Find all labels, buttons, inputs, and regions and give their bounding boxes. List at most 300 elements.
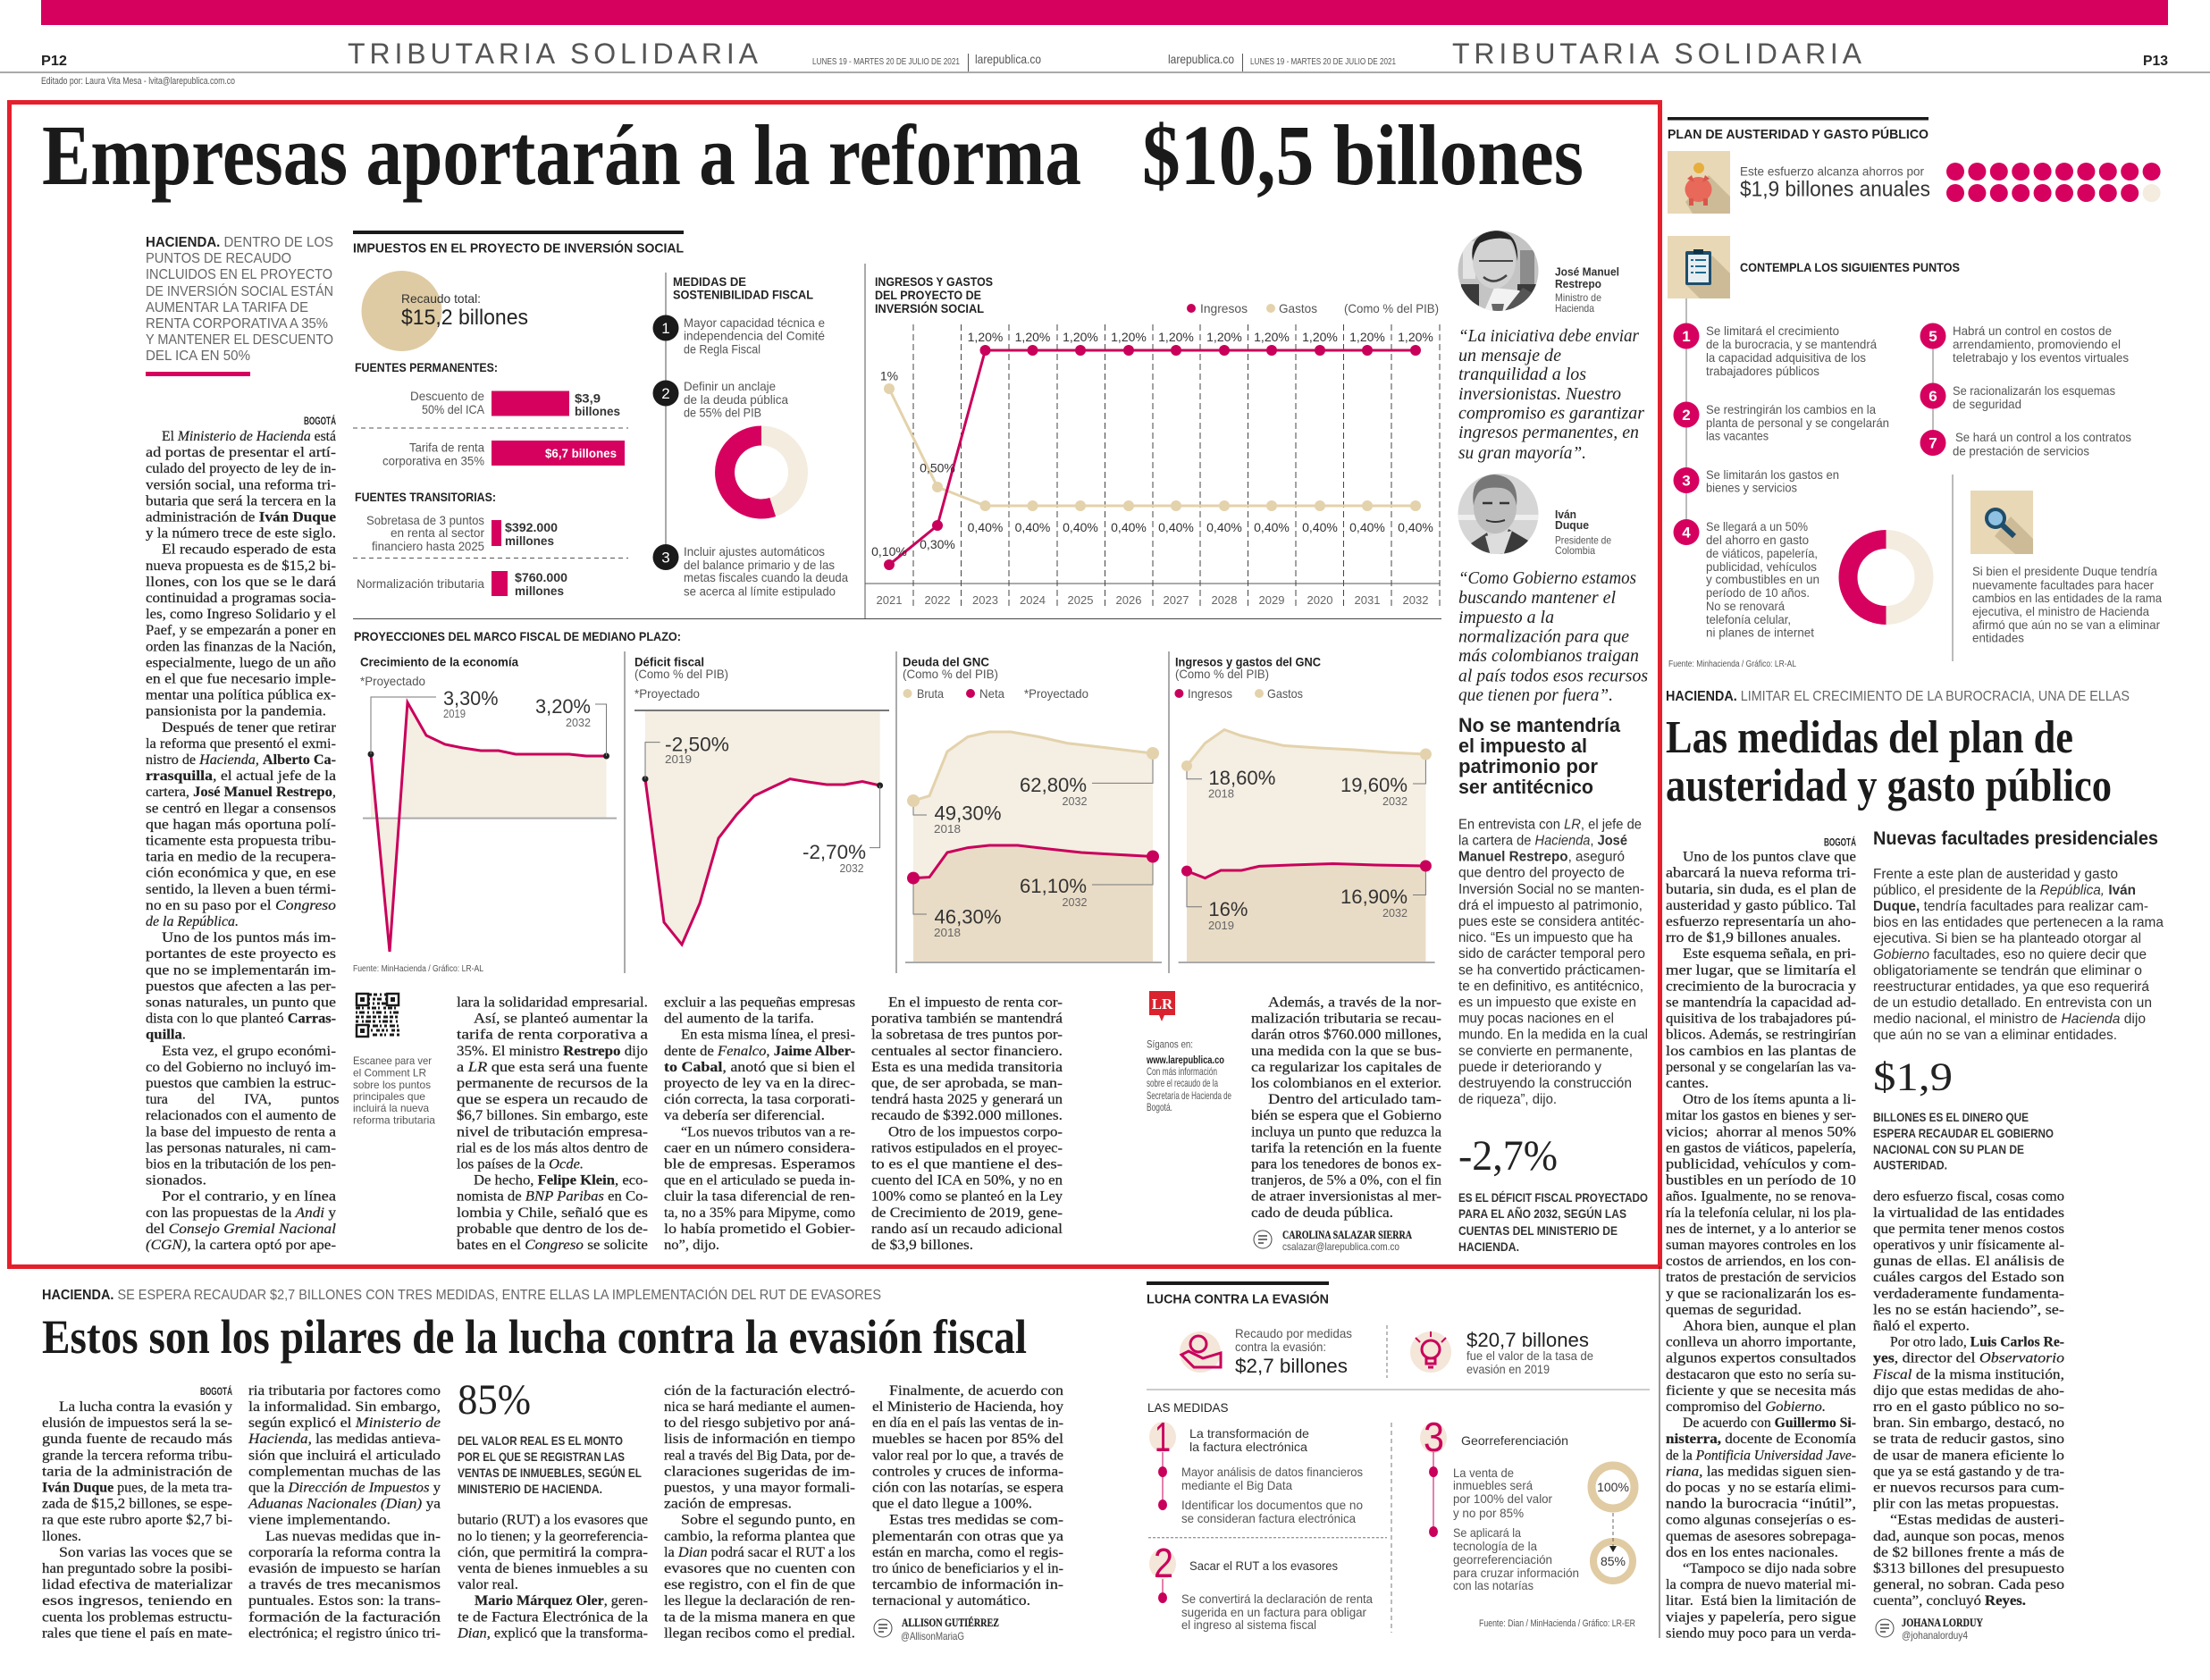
value labels: 1,20% bbox=[1302, 330, 1338, 344]
point 1: Se limitará el crecimiento bbox=[1706, 323, 1839, 338]
austerity article column B: la virtualidad de las entidades bbox=[1873, 1205, 2064, 1221]
article column 3: ble de empresas. Esperamos bbox=[664, 1156, 855, 1172]
point 2: las vacantes bbox=[1706, 429, 1769, 443]
evasion article column 4: zación de empresas. bbox=[664, 1497, 792, 1512]
article column 3: del aumento de la tarifa. bbox=[664, 1012, 814, 1027]
value labels: 1,20% bbox=[1398, 330, 1433, 344]
value labels: 0,40% bbox=[1063, 520, 1098, 534]
article column 5: tranjeros, de 5% a 0%, con el fin bbox=[1251, 1173, 1441, 1189]
article column 1: nistro de Hacienda, Alberto Ca- bbox=[146, 752, 336, 768]
article column 2: bates en el Congreso se solicite bbox=[457, 1238, 648, 1253]
austerity article column A: ficiente y que se necesita más bbox=[1666, 1383, 1856, 1399]
subheading: el impuesto al bbox=[1458, 735, 1587, 757]
chart: ingresos y gastos del GNC: Ingresos y gastos del GNC bbox=[1175, 654, 1321, 668]
evasion article column 5: que el dato llegue a 100%. bbox=[872, 1497, 1032, 1512]
byline: Allison Gutierrez: @AllisonMariaG bbox=[901, 1630, 964, 1642]
article column 1: sonas naturales, un punto que bbox=[146, 995, 336, 1010]
quote: Restrepo: su gran mayoría”. bbox=[1458, 443, 1586, 463]
article column 3: dente de Fenalco, Jaime Alber- bbox=[664, 1044, 855, 1059]
medida 1: Mayor análisis de datos financieros bbox=[1181, 1465, 1363, 1479]
panel: proyecciones del marco fiscal bbox=[353, 629, 1435, 974]
chart: deficit fiscal bbox=[634, 654, 889, 945]
note text: afirmó que aún no se van a eliminar bbox=[1972, 617, 2160, 632]
heading bar bbox=[1147, 1281, 1329, 1285]
site left: larepublica.co bbox=[975, 52, 1041, 66]
article column 1: la reforma que presentó el exmi- bbox=[146, 736, 336, 752]
article column 4: Esta es una medida transitoria bbox=[871, 1060, 1063, 1075]
QR caption bbox=[353, 1054, 435, 1126]
austerity article column B: que ya se está gastando y de tra- bbox=[1873, 1464, 2064, 1479]
article column 4: la sobretasa de tres puntos por- bbox=[871, 1028, 1063, 1043]
article column 2: rial es de los más altos dentro de bbox=[457, 1140, 648, 1155]
icon: clipboard bbox=[1668, 236, 1730, 298]
austerity article column A: cantes. bbox=[1666, 1076, 1709, 1091]
portrait: Duque bbox=[1457, 472, 1541, 556]
point 5: Habrá un control en costos de bbox=[1953, 323, 2112, 338]
item 3: del balance primario y de las bbox=[684, 558, 835, 572]
point 4 bbox=[1673, 519, 1819, 640]
austerity article column A: como algunas consejerías o es- bbox=[1666, 1513, 1856, 1528]
follow text bbox=[1146, 1038, 1231, 1113]
evasion article column 5: muebles se hacen por 85% del bbox=[872, 1432, 1064, 1447]
austerity article column A: destacaron que esto no sería su- bbox=[1666, 1367, 1856, 1382]
chart: deuda del GNC: (Como % del PIB) bbox=[903, 667, 998, 681]
panel: lucha contra la evasion: contra la evasión: bbox=[1235, 1340, 1326, 1354]
austerity article column A bbox=[1666, 835, 1857, 1641]
chart: deuda del GNC: 2032 bbox=[1062, 895, 1087, 909]
article column 1 bbox=[146, 414, 339, 1253]
chart: ingresos y gastos del GNC: 16,90% bbox=[1340, 886, 1408, 908]
evasion article column 4: nica se hará mediante el aumen- bbox=[664, 1399, 855, 1415]
article column 1: ción económica y que, en ese bbox=[146, 866, 336, 881]
chart title bbox=[875, 274, 993, 315]
medida 1: Identificar los documentos que no bbox=[1181, 1498, 1363, 1512]
austerity article column B bbox=[1872, 1189, 2064, 1609]
evasion article column 1: llones. bbox=[42, 1529, 81, 1544]
legend bbox=[1187, 301, 1439, 315]
article column 1: administración de Iván Duque bbox=[146, 509, 336, 525]
austerity article column B: que permita tener menos costos bbox=[1873, 1222, 2064, 1237]
name: Duque: Iván bbox=[1555, 508, 1576, 521]
evasion article column 1: esos ingresos, teniendo en bbox=[42, 1593, 232, 1609]
article column 2: De hecho, Felipe Klein, eco- bbox=[474, 1173, 648, 1189]
quote: Restrepo: ingresos permanentes, en bbox=[1458, 423, 1639, 442]
fuentes transitorias: $392.000 bbox=[505, 520, 558, 534]
austerity article column A: publicidad, vehículos y com- bbox=[1666, 1156, 1856, 1172]
point 2: 2 bbox=[1682, 407, 1691, 424]
heading bar bbox=[1668, 117, 1928, 120]
nuevas facultades text: obligatoriamente se tendrán que eliminar o bbox=[1873, 963, 2142, 979]
austerity article column B: yes, director del Observatorio bbox=[1873, 1351, 2064, 1366]
article column 2: nivel de tributación empresa- bbox=[457, 1124, 648, 1139]
chart title: DEL PROYECTO DE bbox=[875, 288, 981, 302]
chart: deficit fiscal: 2032 bbox=[840, 861, 863, 875]
article column 1: Por el contrario, y en línea bbox=[162, 1189, 336, 1205]
evasion article column 2: evasión de impuesto se harían bbox=[248, 1561, 441, 1576]
chart: deuda del GNC: 46,30% bbox=[935, 906, 1001, 928]
year labels: 2022 bbox=[925, 593, 950, 607]
austerity article column B: operativos y unir físicamente al- bbox=[1873, 1238, 2064, 1253]
sidebar article: drá el impuesto al patrimonio, bbox=[1458, 898, 1643, 913]
austerity article column A: tratos de prestación de servicios bbox=[1666, 1270, 1856, 1285]
chart: crecimiento de la economia: Fuente: MinHacienda / Gráfico: LR-AL bbox=[353, 964, 483, 974]
article column 1: taria en medio de la recupera- bbox=[146, 850, 336, 865]
chart: crecimiento de la economia bbox=[353, 654, 617, 974]
item 3 bbox=[652, 544, 848, 599]
deck: Hacienda austeridad: HACIENDA. LIMITAR EL CRECIMIENTO DE LA BUROCRACIA, UNA DE ELLAS bbox=[1666, 689, 2130, 704]
value labels: 1,20% bbox=[1349, 330, 1385, 344]
point 4: del ahorro en gasto bbox=[1706, 533, 1809, 547]
evasion article column 2: ria tributaria por factores como bbox=[248, 1383, 441, 1399]
article column 5: cado de deuda pública. bbox=[1251, 1205, 1393, 1221]
chart: crecimiento de la economia: 3,20% bbox=[535, 695, 591, 718]
medida 3: inmuebles será bbox=[1453, 1478, 1533, 1492]
evasion article column 5: Estas tres medidas se com- bbox=[889, 1513, 1063, 1528]
article column 3: proyecto de ley va en la direc- bbox=[664, 1076, 855, 1091]
recaudo total bbox=[361, 271, 528, 351]
article column 1: (CGN), la cartera optó por ape- bbox=[146, 1238, 336, 1253]
year labels: 2027 bbox=[1164, 593, 1189, 607]
article column 1: y la número trece de este siglo. bbox=[146, 526, 336, 542]
value labels: 1% bbox=[880, 368, 898, 382]
evasion article column 4 bbox=[664, 1383, 855, 1641]
article column 4: de $3,9 billones. bbox=[871, 1238, 973, 1253]
recaudo total: Recaudo total: bbox=[401, 291, 481, 306]
fuentes transitorias: Normalización tributaria bbox=[357, 576, 484, 591]
deck: Hacienda: DE INVERSIÓN SOCIAL ESTÁN bbox=[146, 282, 333, 299]
follow text: Bogotá. bbox=[1147, 1101, 1172, 1113]
year labels: 2028 bbox=[1212, 593, 1237, 607]
point 6: de seguridad bbox=[1953, 397, 2021, 411]
point 1: la capacidad adquisitiva de los bbox=[1706, 350, 1866, 365]
chart: ingresos y gastos del GNC: 2019 bbox=[1208, 919, 1234, 932]
evasion article column 3: butario (RUT) a los evasores que bbox=[458, 1513, 648, 1528]
article column 1: Después de tener que retirar bbox=[162, 720, 337, 735]
site right: larepublica.co bbox=[1168, 52, 1234, 66]
QR caption: incluirá la nueva bbox=[353, 1102, 429, 1114]
fuentes transitorias: en renta al sector bbox=[391, 525, 484, 540]
austerity article column B: de $2 billones frente a más de bbox=[1873, 1545, 2064, 1560]
editor credit: Editado por: Laura Vita Mesa - lvita@larepublica.com.co bbox=[41, 76, 235, 87]
LR follow box bbox=[1146, 991, 1231, 1113]
austerity article column A: y que se racionalizarán los es- bbox=[1666, 1286, 1856, 1301]
fuentes transitorias: FUENTES TRANSITORIAS: bbox=[355, 490, 496, 504]
article column 5 bbox=[1251, 995, 1441, 1221]
article column 4: centuales al sector financiero. bbox=[871, 1044, 1063, 1059]
article column 5: ca regularizar los capitales de bbox=[1251, 1060, 1441, 1075]
quote: Duque: más colombianos traigan bbox=[1458, 646, 1639, 666]
panel: impuestos en el proyecto bbox=[353, 231, 684, 598]
medida 1: se consideran factura electrónica bbox=[1181, 1511, 1356, 1525]
year labels: 2024 bbox=[1020, 593, 1046, 607]
evasion article column 4: ese registro, con el fin de que bbox=[664, 1577, 855, 1592]
chart: ingresos y gastos del GNC: 2032 bbox=[1382, 794, 1408, 808]
article column 1: rrasquilla , el actual jefe de la bbox=[146, 769, 336, 784]
QR caption: el Comment LR bbox=[353, 1067, 426, 1079]
point 5 bbox=[1920, 323, 2129, 365]
fuentes permanentes: Descuento de bbox=[410, 389, 484, 403]
medida 2: Sacar el RUT a los evasores bbox=[1189, 1558, 1338, 1573]
article column 3: que en el articulado se pueda in- bbox=[664, 1173, 855, 1189]
evasion article column 1: grande la tercera reforma tribu- bbox=[42, 1448, 232, 1463]
chart: deficit fiscal: Déficit fiscal bbox=[634, 654, 704, 668]
article column 1: Paef, y se empezarán a poner en bbox=[146, 623, 336, 638]
item 1: 1 bbox=[661, 320, 670, 337]
panel: lucha contra la evasion: fue el valor de la tasa de bbox=[1466, 1348, 1593, 1363]
point 6 bbox=[1920, 382, 2115, 411]
sidebar article: Inversión Social no se manten- bbox=[1458, 882, 1644, 897]
medida 3: georreferenciación bbox=[1453, 1552, 1552, 1567]
austerity article column A: vicios; ahorrar al menos 50% bbox=[1666, 1124, 1856, 1139]
sidebar article: muy pocas naciones en el bbox=[1458, 1012, 1614, 1027]
article column 1: tura del IVA, puntos bbox=[146, 1092, 339, 1107]
article column 2: probable que dentro de los de- bbox=[457, 1222, 648, 1237]
subheading: ser antitécnico bbox=[1458, 776, 1593, 798]
panel: medidas de sostenibilidad fiscal bbox=[652, 273, 848, 599]
subheading bbox=[1458, 714, 1621, 798]
year gridlines bbox=[913, 324, 1440, 609]
evasion article column 2: que la Dirección de Impuestos y bbox=[248, 1480, 441, 1496]
article column 1: no en su paso por el Congreso bbox=[146, 898, 336, 913]
article column 1: les, como Ingreso Solidario y el bbox=[146, 607, 337, 622]
note text: Si bien el presidente Duque tendría bbox=[1972, 564, 2157, 578]
article column 1: la base del impuesto de renta a bbox=[146, 1124, 336, 1139]
chart: ingresos y gastos del GNC bbox=[1174, 654, 1435, 962]
source: Fuente: Dian / MinHacienda / Gráfico: LR-ER bbox=[1479, 1618, 1635, 1629]
item 2 bbox=[652, 379, 788, 420]
article column 1: Uno de los puntos más im- bbox=[162, 930, 336, 945]
evasion article column 1: Son varias las voces que se bbox=[59, 1545, 232, 1560]
evasion article column 5: en día en el país las ventas de in- bbox=[872, 1415, 1063, 1431]
chart: deuda del GNC: *Proyectado bbox=[1024, 686, 1088, 701]
austerity article column B: plir con las metas propuestas. bbox=[1873, 1497, 2059, 1512]
source: Fuente: Minhacienda / Gráfico: LR-AL bbox=[1668, 659, 1796, 669]
point 1 bbox=[1673, 323, 1877, 378]
article column 2: a LR que esta será una fuente bbox=[457, 1060, 648, 1075]
evasion article column 4: la Dian podrá sacar el RUT a los bbox=[664, 1545, 855, 1560]
austerity article column A: algunos expertos consultados bbox=[1666, 1351, 1856, 1366]
evasion article column 1: La lucha contra la evasión y bbox=[59, 1399, 232, 1415]
medida 3: 3 bbox=[1424, 1414, 1444, 1460]
article column 5: darán otros $760.000 millones, bbox=[1251, 1028, 1441, 1043]
chart: ingresos y gastos del GNC: Gastos bbox=[1267, 686, 1303, 701]
austerity article column A: abarcará la nueva reforma tri- bbox=[1666, 866, 1856, 881]
article column 3: ción correcta, la tasa corporati- bbox=[664, 1092, 855, 1107]
medida 3: La venta de bbox=[1453, 1466, 1514, 1480]
name: Restrepo: Restrepo bbox=[1555, 277, 1601, 290]
austerity article column A: ría la telefonía celular, ni los pla- bbox=[1666, 1205, 1856, 1221]
sidebar article: destruyendo la construcción bbox=[1458, 1076, 1632, 1091]
year labels: 2025 bbox=[1068, 593, 1093, 607]
evasion article column 5: plementarán con otras que ya bbox=[872, 1529, 1063, 1544]
austerity article column A: siendo muy poco para un verda- bbox=[1666, 1625, 1856, 1641]
point 1: 1 bbox=[1682, 328, 1691, 345]
chart: ingresos y gastos del GNC: Ingresos bbox=[1188, 686, 1232, 701]
fuentes transitorias: financiero hasta 2025 bbox=[372, 539, 484, 553]
article column 1: que no se implementarán im- bbox=[146, 962, 336, 978]
evasion article column 2: corporaría la reforma contra la bbox=[248, 1545, 441, 1560]
evasion article column 2: sión que incluirá el articulado bbox=[248, 1448, 441, 1463]
subheading: LAS MEDIDAS bbox=[1147, 1400, 1228, 1415]
austerity article column B: dijo que estas medidas de aho- bbox=[1873, 1383, 2064, 1399]
ring gauges 100% to 85%: 100% bbox=[1597, 1480, 1629, 1494]
byline: Johana Lorduy: @johanalorduy4 bbox=[1902, 1629, 1968, 1642]
article column 2: los países de la Ocde. bbox=[457, 1156, 584, 1172]
austerity article column A: viajes y papelería, pero sigue bbox=[1666, 1609, 1856, 1625]
medida 3 bbox=[1420, 1414, 1579, 1592]
heading: PLAN DE AUSTERIDAD Y GASTO PÚBLICO bbox=[1668, 126, 1928, 142]
evasion article column 5: ción con las notarías, se espera bbox=[872, 1480, 1063, 1496]
article column 4: recaudo de $392.000 millones. bbox=[871, 1108, 1063, 1123]
article column 1: las personas naturales, ni cam- bbox=[146, 1140, 336, 1155]
austerity article column A: bustibles en un período de 10 bbox=[1666, 1173, 1856, 1189]
red highlight frame bbox=[9, 102, 1660, 1267]
quote: Duque: “Como Gobierno estamos bbox=[1458, 568, 1636, 588]
chart: ingresos y gastos del GNC: 18,60% bbox=[1208, 767, 1275, 789]
deck: Hacienda: DEL ICA EN 50% bbox=[146, 349, 250, 364]
evasion article column 3: no lo tienen; y la georreferencia- bbox=[458, 1529, 648, 1544]
chart: deficit fiscal: 2019 bbox=[665, 752, 692, 766]
austerity article column B: gunas de ellas. El análisis de bbox=[1873, 1254, 2064, 1269]
article column 2: lombia y Chile, señaló que es bbox=[457, 1205, 648, 1221]
austerity article column A: De acuerdo con Guillermo Si- bbox=[1683, 1415, 1856, 1431]
article column 5: tarifa la retención en la fuente bbox=[1251, 1140, 1441, 1155]
article column 1: cartera, José Manuel Restrepo , bbox=[146, 785, 336, 800]
name: Restrepo: Hacienda bbox=[1555, 302, 1594, 315]
ingresos series bbox=[884, 345, 1421, 570]
note text: nuevamente facultades para hacer bbox=[1972, 577, 2154, 592]
header rule bbox=[0, 71, 2210, 73]
fuentes permanentes: billones bbox=[575, 404, 620, 418]
evasion article column 3: venta de bienes inmuebles a su bbox=[458, 1561, 648, 1576]
value labels: 0,10% bbox=[871, 544, 907, 559]
nuevas facultades text: que aún no se van a eliminar entidades. bbox=[1873, 1028, 2117, 1043]
legend: Ingresos bbox=[1200, 301, 1248, 315]
heading: PROYECCIONES DEL MARCO FISCAL DE MEDIANO PLAZO: bbox=[354, 629, 681, 643]
item 3: Incluir ajustes automáticos bbox=[684, 544, 825, 559]
fuentes permanentes: corporativa en 35% bbox=[382, 454, 484, 468]
big number caption bbox=[458, 1433, 642, 1496]
medida 2: 2 bbox=[1154, 1540, 1173, 1586]
article column 1: del Consejo Gremial Nacional bbox=[146, 1222, 337, 1237]
article column 3: to Cabal , anotó que si bien el bbox=[664, 1060, 856, 1075]
chart: deficit fiscal: *Proyectado bbox=[634, 686, 700, 701]
austerity article column B: Fiscal de la misma institución, bbox=[1872, 1367, 2064, 1382]
article column 3: lo había prometido el Gobier- bbox=[664, 1222, 855, 1237]
fuentes permanentes: Tarifa de renta bbox=[409, 440, 484, 454]
austerity article column A: butaria, sin duda, es el plan de bbox=[1666, 882, 1856, 897]
point 7: de prestación de servicios bbox=[1953, 443, 2089, 458]
deck: Hacienda: INCLUIDOS EN EL PROYECTO bbox=[146, 267, 332, 282]
evasion article column 2: complementan muchas de las bbox=[248, 1464, 441, 1479]
chart: deuda del GNC: 2032 bbox=[1062, 794, 1087, 808]
QR caption: Escanee para ver bbox=[353, 1054, 432, 1067]
chart: ingresos y gastos del GNC: 19,60% bbox=[1340, 774, 1408, 796]
panel: lucha contra la evasion: evasión en 2019 bbox=[1466, 1362, 1550, 1376]
evasion article column 1: lidad efectiva de materializar bbox=[42, 1577, 233, 1592]
quote: Restrepo: inversionistas. Nuestro bbox=[1458, 384, 1621, 404]
byline: Carolina Salazar: CAROLINA SALAZAR SIERRA bbox=[1282, 1228, 1412, 1241]
fuentes transitorias: Sobretasa de 3 puntos bbox=[366, 513, 484, 527]
austerity article column B: $313 billones del presupuesto bbox=[1873, 1561, 2064, 1576]
point 4: y combustibles en un bbox=[1706, 572, 1819, 586]
austerity article column A: compromiso del Gobierno. bbox=[1666, 1399, 1826, 1415]
item 3: se acerca al límite estipulado bbox=[684, 584, 836, 599]
article column 3: “Los nuevos tributos van a re- bbox=[681, 1124, 855, 1139]
icon: hand with coin bbox=[1180, 1331, 1221, 1373]
donut chart 55% bbox=[725, 436, 798, 509]
follow text: www.larepublica.co bbox=[1146, 1054, 1224, 1066]
nuevas facultades text: Gobierno facultades, eso no quiere decir que bbox=[1873, 947, 2147, 962]
heading: MEDIDAS DE bbox=[673, 274, 746, 289]
value labels: 0,40% bbox=[1111, 520, 1147, 534]
austerity article column A: quemas de seguridad. bbox=[1666, 1302, 1802, 1317]
main headline: Empresas aportarán a la reforma bbox=[42, 107, 1081, 203]
year labels: 2023 bbox=[972, 593, 998, 607]
nuevas facultades text: Duque, tendría facultades para realizar cam- bbox=[1873, 899, 2148, 914]
byline: Johana Lorduy bbox=[1876, 1616, 1983, 1642]
medida 3: Georreferenciación bbox=[1461, 1433, 1568, 1448]
portrait: Restrepo bbox=[1457, 229, 1541, 313]
austerity article column A: riana, las medidas siguen sien- bbox=[1666, 1464, 1856, 1479]
chart: deuda del GNC: 2018 bbox=[934, 926, 961, 939]
article column 1: continuidad a programas socia- bbox=[146, 591, 336, 606]
point 5: teletrabajo y los eventos virtuales bbox=[1953, 350, 2129, 365]
article column 1: nueva propuesta es de $15,2 bi- bbox=[146, 559, 336, 574]
article column 1: llones, con los que se le dará bbox=[146, 575, 336, 590]
point 2: planta de personal y se congelarán bbox=[1706, 416, 1889, 430]
austerity article column A: personal y se congelarían las va- bbox=[1666, 1060, 1856, 1075]
medida 2: el ingreso al sistema fiscal bbox=[1181, 1617, 1316, 1632]
QR code block bbox=[353, 994, 435, 1126]
byline: Johana Lorduy: JOHANA LORDUY bbox=[1902, 1616, 1983, 1629]
sidebar article: te en definitivo, es antitécnico, bbox=[1458, 979, 1643, 994]
big number caption bbox=[1873, 1110, 2054, 1172]
austerity article column A: Otro de los ítems apunta a li- bbox=[1683, 1092, 1856, 1107]
chart: deuda del GNC: Bruta bbox=[917, 686, 944, 701]
evasion article column 4: lisis de información en tiempo bbox=[664, 1432, 855, 1447]
nuevas facultades text: público, el presidente de la República, Iván bbox=[1873, 883, 2136, 898]
article column 1: ad portas de presentar el artí- bbox=[146, 445, 336, 460]
evasion article column 2: según explicó el Ministerio de bbox=[248, 1415, 441, 1431]
article column 1: versión social, una reforma tri- bbox=[146, 477, 336, 492]
point 3: 3 bbox=[1682, 472, 1691, 490]
evasion article column 4: ción de la facturación electró- bbox=[664, 1383, 855, 1399]
evasion article column 5: Finalmente, de acuerdo con bbox=[889, 1383, 1063, 1399]
heading bar bbox=[353, 231, 684, 234]
austerity article column A: suman mayores controles en los bbox=[1666, 1238, 1856, 1253]
chart: deuda del GNC: 49,30% bbox=[935, 802, 1001, 824]
quote: Restrepo: “La iniciativa debe enviar bbox=[1458, 326, 1639, 346]
sidebar article: que dentro del proyecto de bbox=[1458, 866, 1625, 881]
evasion article column 5: tercambio de información in- bbox=[872, 1577, 1063, 1592]
sidebar article: pues este se considera antitéc- bbox=[1458, 914, 1644, 929]
big number caption: AUSTERIDAD. bbox=[1873, 1158, 1947, 1172]
article column 5: bién se espera que el Gobierno bbox=[1251, 1108, 1441, 1123]
article column 5: una medida con la que se bus- bbox=[1251, 1044, 1441, 1059]
point 4: 4 bbox=[1682, 524, 1691, 542]
point 1: de la burocracia, y se mantendrá bbox=[1706, 337, 1877, 351]
heading: IMPUESTOS EN EL PROYECTO DE INVERSIÓN SOCIAL bbox=[353, 239, 684, 256]
evasion article column 5: el Ministerio de Hacienda, hoy bbox=[872, 1399, 1063, 1415]
value labels: 0,40% bbox=[1302, 520, 1338, 534]
legend: (Como % del PIB) bbox=[1344, 301, 1439, 315]
chart title: INVERSIÓN SOCIAL bbox=[875, 300, 984, 315]
point 4: No se renovará bbox=[1706, 599, 1785, 613]
point 3 bbox=[1673, 467, 1839, 495]
evasion article column 3 bbox=[457, 1513, 648, 1641]
point 2 bbox=[1673, 402, 1889, 443]
